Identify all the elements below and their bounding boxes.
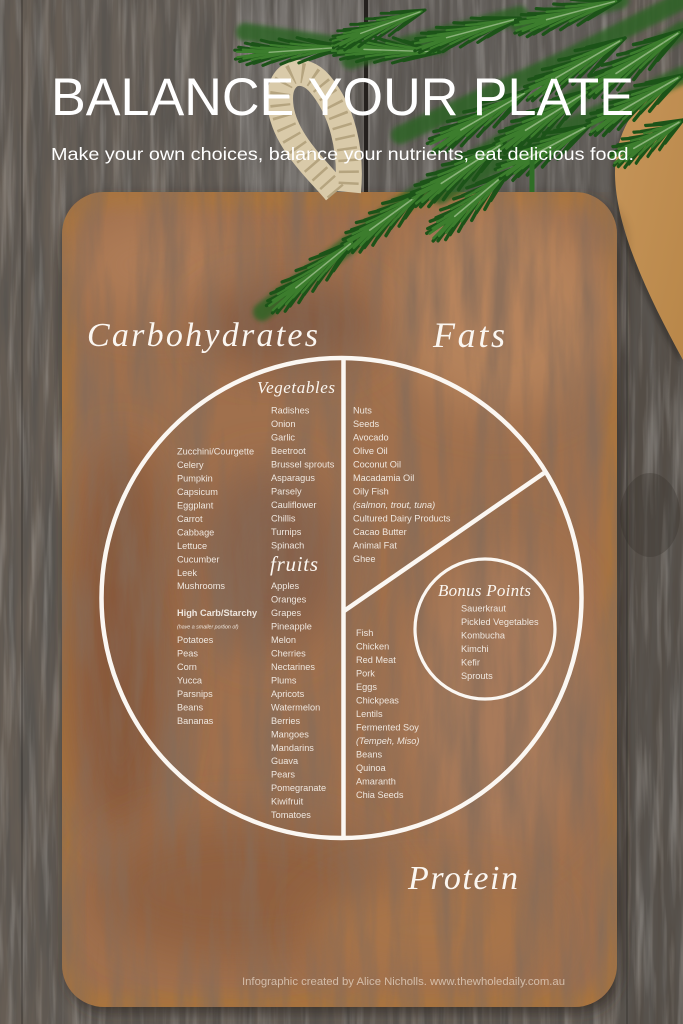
panel: fruits list: Melon [271,635,296,645]
subtitle: Make your own choices, balance your nutrients, eat delicious food. [51,144,634,164]
panel: fruits list: Berries [271,716,301,726]
panel: fats list: (salmon, trout, tuna) [353,500,435,510]
panel: fruits list: Mangoes [271,730,309,740]
panel: carbohydrates, high carb and starchy: Parsnips [177,689,213,699]
panel: fruits list: Apples [271,581,299,591]
panel: vegetables list: Cauliflower [271,500,316,510]
panel: protein list: (Tempeh, Miso) [356,736,419,746]
panel: fruits list: Plums [271,676,297,686]
panel: vegetables list: Radishes [271,406,310,416]
heading: Vegetables: Vegetables [257,378,335,397]
panel: fats list: Animal Fat [353,540,397,550]
panel: protein list: Chicken [356,642,389,652]
bonus points circle [415,559,555,699]
panel: fats list: Cultured Dairy Products [353,514,451,524]
panel: carbohydrates, non-starchy vegetables: Celery [177,460,204,470]
panel: carbohydrates, high carb and starchy: Peas [177,648,198,658]
panel: fats list: Ghee [353,554,375,564]
panel: carbohydrates, non-starchy vegetables: Lettuce [177,541,207,551]
panel: carbohydrates, high carb and starchy: High Carb/Starchy [177,608,258,618]
panel: protein list [356,628,419,800]
panel: bonus points list: Pickled Vegetables [461,617,539,627]
panel: protein list: Red Meat [356,655,396,665]
panel: protein list: Lentils [356,709,383,719]
panel: fruits list: Kiwifruit [271,796,304,806]
panel: carbohydrates, non-starchy vegetables [177,446,254,591]
panel: carbohydrates, high carb and starchy: Yucca [177,676,203,686]
cutting board [62,192,621,1013]
panel: carbohydrates, non-starchy vegetables: Carrot [177,514,203,524]
panel: carbohydrates, non-starchy vegetables: Eggplant [177,500,214,510]
panel: bonus points list: Kombucha [461,630,506,640]
panel: fruits list: Oranges [271,594,307,604]
panel: carbohydrates, high carb and starchy [177,608,258,726]
panel: vegetables list: Turnips [271,527,302,537]
panel: carbohydrates, high carb and starchy: Bananas [177,716,214,726]
panel: fruits list: Pomegranate [271,783,326,793]
panel: bonus points list: Kimchi [461,644,489,654]
panel: fruits list: Pineapple [271,622,312,632]
panel: protein list: Fermented Soy [356,722,419,732]
panel: fruits list: Apricots [271,689,305,699]
panel: carbohydrates, non-starchy vegetables: Mushrooms [177,581,225,591]
heading: Protein: Protein [407,860,518,897]
panel: carbohydrates, non-starchy vegetables: Leek [177,568,197,578]
panel: fats list: Olive Oil [353,446,388,456]
panel: protein list: Eggs [356,682,377,692]
panel: fats list: Avocado [353,432,389,442]
panel: fats list: Nuts [353,406,372,416]
panel: carbohydrates, non-starchy vegetables: Capsicum [177,487,218,497]
panel: carbohydrates, high carb and starchy: (have a smaller portion of) [177,624,239,630]
panel: fruits list: Tomatoes [271,810,311,820]
panel: carbohydrates, non-starchy vegetables: Zucchini/Courgette [177,446,254,456]
panel: vegetables list: Beetroot [271,446,306,456]
icon: rope loop [280,73,349,192]
panel: fats list: Seeds [353,419,379,429]
panel: carbohydrates, non-starchy vegetables: Cabbage [177,528,214,538]
panel: protein list: Pork [356,668,375,678]
panel: vegetables list: Garlic [271,432,295,442]
footer credit: Infographic created by Alice Nicholls. www.thewholedaily.com.au [242,976,565,988]
panel: carbohydrates, high carb and starchy: Potatoes [177,635,214,645]
panel: bonus points list [461,604,539,681]
panel: carbohydrates, high carb and starchy: Corn [177,662,197,672]
panel: protein list: Chia Seeds [356,790,404,800]
panel: vegetables list: Parsely [271,486,302,496]
panel: bonus points list: Kefir [461,658,480,668]
panel: fats list [353,406,451,564]
panel: vegetables list: Chillis [271,514,296,524]
panel: fruits list: Grapes [271,608,302,618]
icon: rosemary branches [234,0,683,320]
panel: fats list: Cacao Butter [353,527,407,537]
panel: vegetables list: Brussel sprouts [271,460,335,470]
panel: fruits list: Watermelon [271,702,320,712]
icon: wooden spoon [612,80,683,364]
panel: protein list: Fish [356,628,373,638]
panel: fruits list [271,581,326,820]
panel: vegetables list: Asparagus [271,473,315,483]
panel: protein list: Quinoa [356,763,387,773]
panel: bonus points list: Sprouts [461,671,493,681]
plate diagram [102,358,582,838]
panel: protein list: Chickpeas [356,696,399,706]
panel: fats list: Coconut Oil [353,460,401,470]
heading: Fats: Fats [432,315,505,355]
panel: vegetables list [271,406,335,550]
panel: fats list: Macadamia Oil [353,473,414,483]
panel: fruits list: Guava [271,756,299,766]
panel: fruits list: Nectarines [271,662,315,672]
heading: Bonus Points: Bonus Points [438,581,531,600]
heading: fruits: fruits [270,552,318,576]
panel: fruits list: Mandarins [271,743,314,753]
title: BALANCE YOUR PLATE [51,68,634,127]
panel: carbohydrates, non-starchy vegetables: Cucumber [177,554,219,564]
panel: bonus points list: Sauerkraut [461,604,506,614]
panel: fruits list: Pears [271,770,295,780]
panel: fats list: Oily Fish [353,486,389,496]
panel: protein list: Beans [356,750,382,760]
panel: protein list: Amaranth [356,776,396,786]
panel: vegetables list: Onion [271,419,296,429]
panel: carbohydrates, high carb and starchy: Beans [177,702,203,712]
panel: vegetables list: Spinach [271,540,304,550]
heading: Carbohydrates: Carbohydrates [87,317,318,354]
panel: fruits list: Cherries [271,648,306,658]
panel: carbohydrates, non-starchy vegetables: Pumpkin [177,474,213,484]
